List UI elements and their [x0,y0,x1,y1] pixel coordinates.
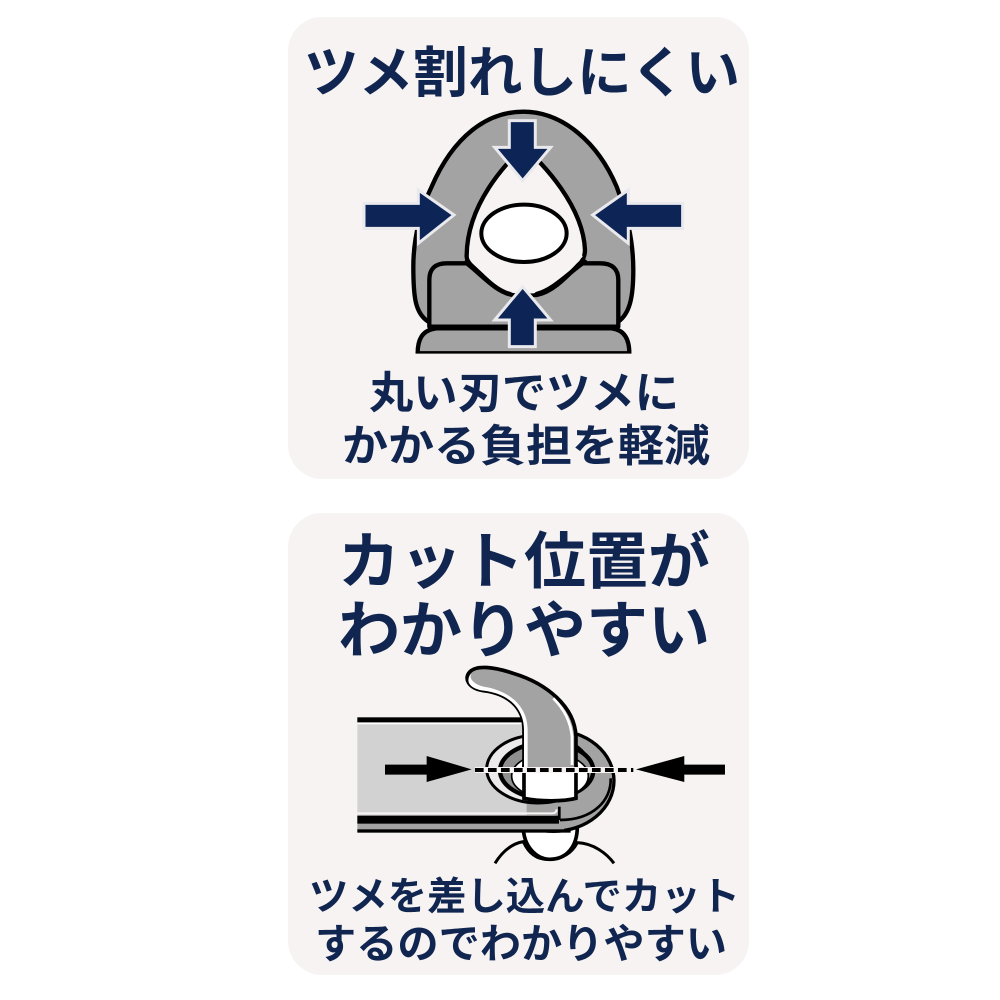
heading: nail cracking: ツメ割れしにくい [304,42,740,104]
arrow: cut position right [636,756,725,782]
heading: cut position line 1: カット位置が [338,528,710,597]
text: cut position line 1: ツメを差し込んでカット [309,876,740,919]
front opening fill [469,200,583,293]
arrow: from left [364,190,454,243]
arrow: from top [495,121,551,181]
teardrop opening [467,147,585,297]
arrow: from right [593,190,683,243]
handle bottom layers [357,823,564,831]
nail ellipse [481,205,567,262]
outer blade [413,112,633,322]
finger [495,842,614,863]
nail lower part [524,767,576,801]
ring hole [487,735,590,803]
icon: rounded blade with four arrows [364,112,683,355]
panel: cut position [288,513,749,975]
panel: nail cracking [288,17,749,479]
text: rounded blade line 1: 丸い刃でツメに [369,369,679,418]
icon: clipper with nail and cut line [357,667,725,863]
handle body [357,721,557,823]
dashed cut line [475,761,633,779]
outer ring [493,730,614,831]
text: cut position line 2: するのでわかりやすい [315,921,727,967]
base [418,328,629,353]
arrow: from bottom [495,287,551,347]
nail upper part [467,667,576,770]
ring right rim [560,778,611,820]
heading: cut position line 2: わかりやすい [338,597,710,666]
arrow: cut position left [385,756,472,782]
text: rounded blade line 2: かかる負担を軽減 [342,422,710,471]
front blade piece [429,263,618,327]
